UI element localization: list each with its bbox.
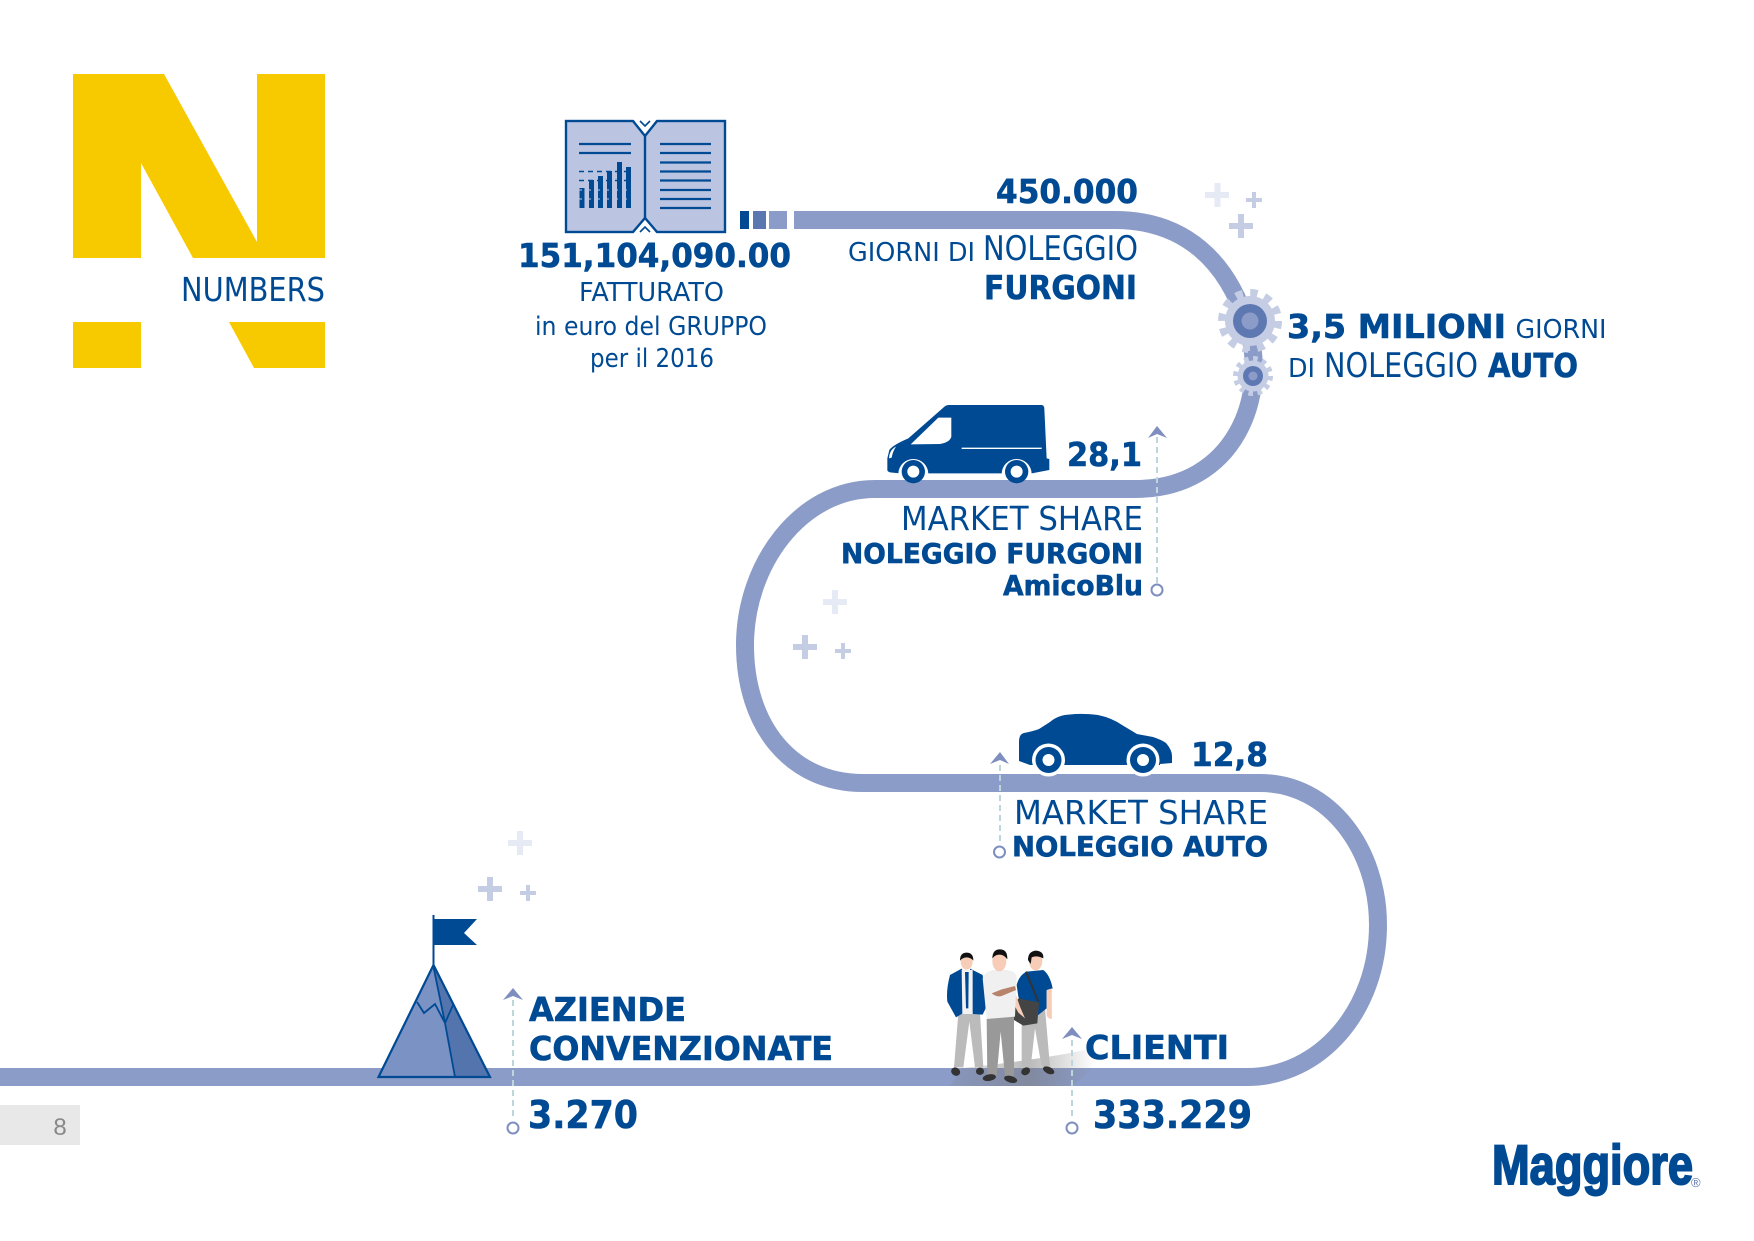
stat: 3,5 milioni giorni noleggio auto: DI (1288, 354, 1315, 384)
stat: market share noleggio auto: NOLEGGIO AUTO (1012, 830, 1268, 863)
stat: 450.000 giorni noleggio furgoni: NOLEGGIO (983, 229, 1138, 269)
marker arrow: clienti (1062, 1027, 1082, 1134)
stat: 3,5 milioni giorni noleggio auto (1287, 307, 1606, 386)
stat: market share noleggio furgoni: NOLEGGIO FURGONI (841, 537, 1143, 570)
page number: 8 (53, 1114, 67, 1141)
stat: clienti: 333.229 (1093, 1093, 1252, 1137)
icon: three people (947, 949, 1056, 1084)
stat: 3,5 milioni giorni noleggio auto: NOLEGGIO (1324, 346, 1478, 386)
people shadow (950, 1048, 1095, 1086)
stat: 450.000 giorni noleggio furgoni: 450.000 (996, 172, 1138, 211)
revenue figure: 151,104,090.00 (518, 236, 791, 275)
icon: gears (1222, 293, 1278, 394)
icon: van (887, 405, 1049, 483)
stat: aziende convenzionate: AZIENDE (529, 990, 686, 1029)
right man (1013, 951, 1056, 1077)
plus signs top right (1205, 183, 1262, 238)
stat: 450.000 giorni noleggio furgoni: GIORNI DI (848, 238, 975, 268)
plus signs middle (793, 590, 851, 659)
icon: mountain with flag (378, 915, 490, 1077)
revenue figure: FATTURATO (579, 278, 724, 308)
revenue figure: per il 2016 (590, 344, 714, 374)
stat: market share noleggio auto (1012, 735, 1268, 863)
stat: 450.000 giorni noleggio furgoni (848, 172, 1138, 307)
heading: NUMBERS: NUMBERS (181, 270, 325, 309)
stat: 3,5 milioni giorni noleggio auto: GIORNI (1516, 315, 1606, 345)
stat: market share noleggio furgoni: 28,1 (1067, 435, 1142, 474)
icon: open book with chart (566, 119, 725, 234)
stat: market share noleggio furgoni (841, 435, 1143, 602)
logo: yellow N (73, 74, 325, 368)
page number (0, 1105, 80, 1145)
logo: Maggiore: ® (1691, 1175, 1701, 1190)
marker arrow: aziende (503, 988, 523, 1134)
stat: market share noleggio auto: MARKET SHARE (1014, 793, 1268, 832)
marker arrow: furgoni (1148, 426, 1167, 596)
plus signs bottom left (478, 831, 536, 901)
revenue figure (518, 236, 791, 374)
middle man (982, 949, 1018, 1084)
stat: market share noleggio auto: 12,8 (1191, 735, 1268, 774)
stat: 450.000 giorni noleggio furgoni: FURGONI (984, 268, 1137, 307)
logo: Maggiore: Maggiore (1492, 1133, 1693, 1196)
marker arrow: auto (990, 752, 1009, 858)
stat: market share noleggio furgoni: MARKET SHARE (901, 499, 1143, 538)
stat: clienti: CLIENTI (1085, 1028, 1229, 1067)
stat: clienti (1085, 1028, 1252, 1137)
left man (947, 953, 987, 1077)
revenue figure: in euro del GRUPPO (535, 312, 767, 342)
icon: car (1019, 714, 1172, 776)
stat: 3,5 milioni giorni noleggio auto: 3,5 MILIONI (1287, 307, 1506, 346)
road start squares (740, 211, 787, 229)
stat: aziende convenzionate: 3.270 (528, 1093, 638, 1137)
stat: market share noleggio furgoni: AmicoBlu (1003, 569, 1143, 602)
stat: 3,5 milioni giorni noleggio auto: AUTO (1488, 346, 1578, 385)
road path (0, 220, 1378, 1077)
stat: aziende convenzionate (528, 990, 833, 1137)
stat: aziende convenzionate: CONVENZIONATE (529, 1029, 833, 1068)
